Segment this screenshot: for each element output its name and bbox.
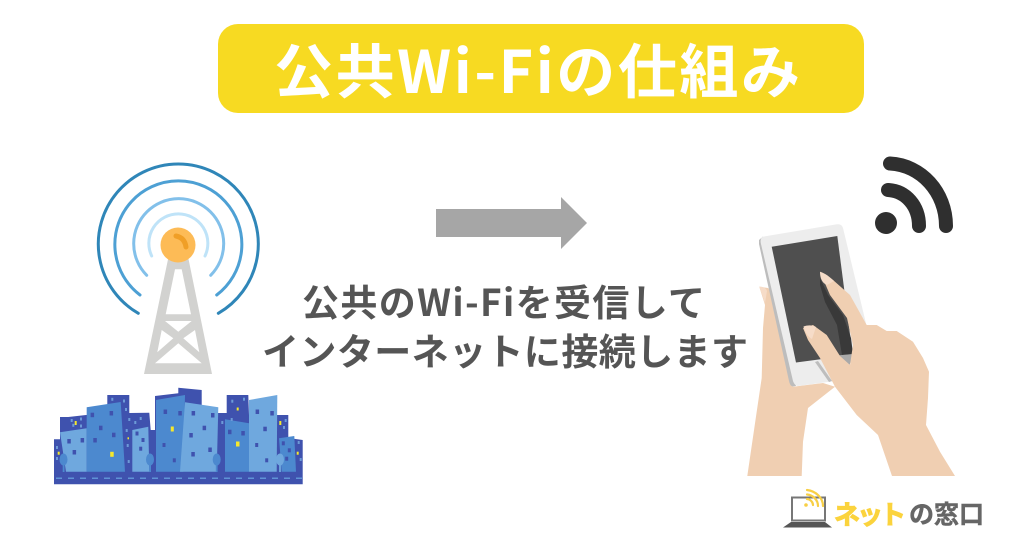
icon: wifi symbol (875, 164, 946, 234)
title banner: 公共Wi-Fiの仕組み (274, 25, 800, 110)
body text: 公共のWi-Fiを受信して (302, 273, 705, 327)
logo: ネットの窓口: ネット (834, 495, 906, 532)
body text (262, 273, 748, 376)
right hand (803, 272, 955, 476)
body text: インターネットに接続します (262, 322, 748, 376)
arrow (436, 197, 587, 249)
illustration: night city skyline (54, 388, 303, 484)
finger shadow (820, 278, 853, 355)
illustration: hands holding smartphone (747, 224, 955, 476)
logo: ネットの窓口: の窓口 (909, 495, 984, 531)
logo: ネットの窓口 (783, 490, 984, 532)
left hand (747, 287, 835, 476)
icon: radio tower with signal arcs (98, 164, 258, 374)
smartphone (759, 236, 796, 386)
icon: laptop with wifi (783, 490, 832, 528)
